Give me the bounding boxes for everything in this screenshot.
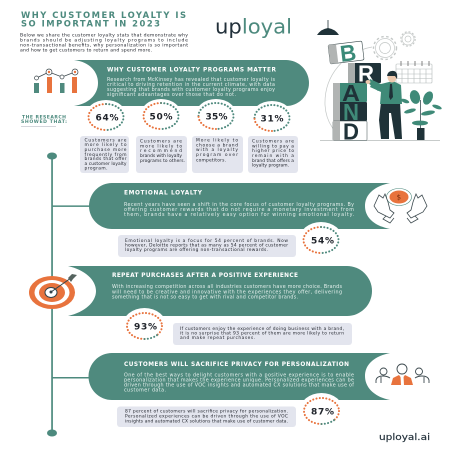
body text: them, brands have a relatively easy option for winning emotional loyalty. [124, 212, 354, 218]
card: emotional loyalty stat: Emotional loyalty is a focus for 54 percent of brands. Now [125, 238, 288, 244]
card: 31% detail: remain with a [252, 153, 294, 159]
card: 64% detail: more likely to [84, 142, 127, 148]
icon: hands holding coin: $ [397, 194, 401, 202]
icon: three people [376, 364, 429, 385]
stat: 64%: 64% [96, 113, 118, 123]
card: 35% detail: with a loyalty [196, 147, 238, 153]
intro text: non-transactional benefits, why personalization is so important [20, 42, 188, 48]
icon: gears and background curve [325, 32, 415, 140]
title: WHY CUSTOMER LOYALTY IS [21, 10, 186, 20]
card: 31% detail: Customers are [252, 138, 294, 144]
body text: something that is not so easy to get with rival and competitor brands. [112, 295, 298, 301]
block: N: N [343, 99, 359, 125]
label: the research showed that [21, 114, 67, 127]
icon: calendar [396, 61, 432, 83]
card: 64% detail: program. [84, 166, 108, 172]
stat: 93% [122, 308, 166, 344]
card: emotional loyalty stat: however, Deloitte reports that as many as 54 percent of customer [125, 243, 288, 249]
footer url: uployal.ai [379, 433, 430, 443]
card: emotional loyalty stat: loyalty programs are offering non-transactional rewards. [125, 247, 268, 253]
card: 64% detail: frequently from [84, 152, 126, 158]
figure: potted plant [400, 89, 442, 140]
logo: uployal: uployal [215, 14, 292, 38]
stat: 87% [300, 393, 344, 429]
heading: EMOTIONAL LOYALTY [124, 191, 203, 197]
stat: 31% [251, 101, 293, 135]
body text [112, 284, 342, 301]
card: personalization stat: 87 percent of customers will sacrifice privacy for personalization. [125, 409, 288, 415]
card: repeat purchases stat: and make repeat purchases. [180, 335, 255, 341]
panel: repeat purchases [68, 266, 372, 316]
intro text: and how to get customers to return and spend more. [20, 47, 152, 53]
ground line [320, 140, 440, 142]
block: B: B [339, 39, 358, 67]
card: 50% detail: programs to others. [140, 158, 185, 164]
body text: critical to driving retention in the current climate, with data [107, 82, 275, 88]
block: A: A [342, 80, 360, 106]
heading: REPEAT PURCHASES AFTER A POSITIVE EXPERIENCE [112, 273, 298, 279]
card: emotional loyalty stat [118, 235, 296, 257]
illustration: brand blocks and businessman [317, 20, 442, 144]
card: 64% detail: Customers are [84, 138, 127, 144]
body text: personalization that makes the experience unique. Personalized experiences can be [124, 378, 354, 384]
timeline [47, 152, 90, 436]
icon: hands holding coin [374, 188, 427, 223]
card: 64% detail [80, 136, 129, 173]
icon: target and arrow [29, 274, 77, 309]
card: 35% detail: competitors. [196, 158, 226, 164]
card: personalization stat: insights and automated CX solutions that make use of customer data. [125, 418, 288, 424]
body text: Research from McKinsey has revealed that customer loyalty is [107, 77, 276, 83]
stat: 50%: 50% [150, 112, 172, 122]
icon: hanging lamp [317, 20, 339, 35]
card: repeat purchases stat: it is no surprise that 93 percent of them are more likely to return [180, 331, 344, 337]
card: personalization stat: Personalized experiences can be driven through the use of VOC [125, 413, 288, 419]
card: repeat purchases stat [173, 323, 352, 345]
body text: will need to be creative and innovative with the experiences they offer, delivering [112, 290, 342, 296]
card: 50% detail: more likely to [140, 144, 182, 150]
icon: bar and line chart [34, 69, 78, 93]
stat: 35%: 35% [206, 112, 228, 122]
stat: 93%: 93% [134, 322, 157, 332]
body text: driven through the use of VOC insights and automated CX solutions that make use of [124, 383, 354, 389]
body text [124, 202, 354, 218]
card: 50% detail: r e c o m m e n d [140, 148, 182, 154]
card: 50% detail: brands with loyalty [140, 153, 182, 159]
heading: CUSTOMERS WILL SACRIFICE PRIVACY FOR PERSONALIZATION [124, 362, 349, 368]
intro text: Below we share the customer loyalty stats that demonstrate why [20, 33, 188, 39]
panel: sacrifice privacy for personalization [88, 353, 390, 400]
heading: WHY CUSTOMER LOYALTY PROGRAMS MATTER [107, 68, 277, 74]
body text: customer data. [124, 388, 166, 394]
label: the research showed that: SHOWED THAT: [21, 119, 67, 125]
card: 31% detail [248, 136, 298, 173]
body text: Recent years have seen a shift in the core focus of customer loyalty programs. By [124, 202, 354, 208]
body text: With increasing competition across all industries customers have more choice. Brands [112, 284, 342, 290]
figure: businessman [366, 71, 402, 139]
body text [107, 77, 276, 98]
body text [124, 373, 354, 394]
block: R: R [358, 60, 374, 86]
card: 64% detail: a customer loyalty [84, 161, 127, 167]
stat: 54%: 54% [311, 236, 334, 246]
card: repeat purchases stat: If customers enjoy the experience of doing business with a brand, [180, 326, 344, 332]
card: 50% detail: Customers are [140, 138, 182, 144]
card: 31% detail: brand that offers a [252, 158, 294, 164]
card: 64% detail: brands that offer [84, 156, 127, 162]
card: 35% detail: More likely to [196, 138, 238, 144]
stat: 87%: 87% [311, 407, 334, 417]
card: 31% detail: higher price to [252, 148, 294, 154]
intro text [20, 33, 188, 53]
stat: 64% [85, 100, 127, 134]
card: 31% detail: loyalty program. [252, 162, 289, 168]
card: 35% detail: choose a brand [196, 142, 238, 148]
panel: why customer loyalty programs matter [74, 60, 309, 106]
body text: offering customer rewards that do not require a monetary investment from [124, 207, 354, 213]
stat: 50% [140, 99, 182, 133]
card: 35% detail [192, 136, 243, 173]
block: D: D [343, 118, 359, 144]
card: personalization stat [117, 406, 296, 427]
stat: 35% [195, 99, 237, 133]
body text: suggesting that brands with customer loyalty programs enjoy [107, 87, 275, 93]
stat: 54% [299, 222, 343, 258]
card: 31% detail: willing to pay a [252, 144, 294, 150]
body text: One of the best ways to delight customers with a positive experience is to enable [124, 373, 354, 379]
intro text: brands should be adjusting loyalty programs to include [20, 38, 188, 44]
title: SO IMPORTANT IN 2023 [21, 18, 160, 28]
title [21, 10, 186, 28]
body text: significant advantages over those that do not. [107, 92, 236, 98]
label: the research showed that: THE RESEARCH [22, 114, 66, 120]
card: 35% detail: program over [196, 152, 238, 158]
stat: 31%: 31% [260, 114, 284, 124]
panel: emotional loyalty [89, 183, 390, 229]
card: 50% detail [136, 136, 187, 173]
card: 64% detail: purchase more [84, 147, 127, 153]
